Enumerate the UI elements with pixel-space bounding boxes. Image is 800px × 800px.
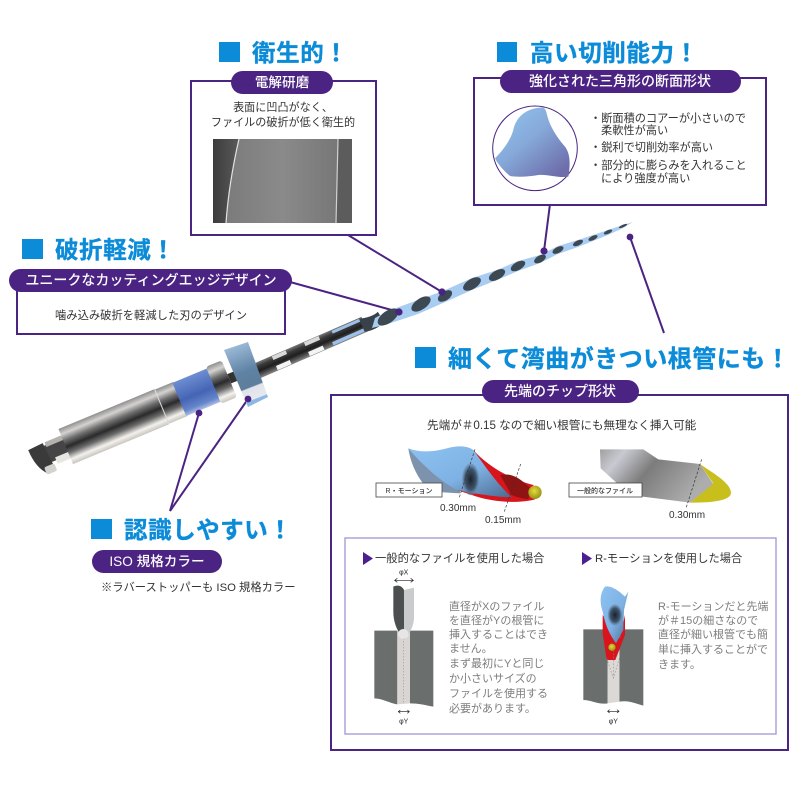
note: ※ラバーストッパーも ISO 規格カラー xyxy=(101,580,296,594)
text: general file: ファイルを使用する xyxy=(449,687,548,700)
pill label xyxy=(231,71,333,94)
pill label: ユニークなカッティングエッジデザイン xyxy=(25,272,277,288)
heading square xyxy=(219,42,240,62)
diagram: general file in root canal: φY xyxy=(399,718,409,725)
measurement: 0.15mm xyxy=(485,515,521,526)
text: general file: まず最初にYと同じ xyxy=(449,657,544,670)
frame xyxy=(191,81,376,235)
text: R-motion xyxy=(658,600,768,671)
heading: 衛生的！ xyxy=(252,40,348,66)
pill label xyxy=(482,380,639,403)
diagram: general file in root canal xyxy=(374,569,433,725)
description: 噛み込み破折を軽減した刃のデザイン xyxy=(55,308,247,322)
pill label: ISO 規格カラー xyxy=(109,554,205,569)
bullet list: により強度が高い xyxy=(601,171,690,185)
panel: 細くて湾曲がきつい根管にも xyxy=(331,345,790,750)
leader lines xyxy=(170,204,664,511)
measurement: 0.30mm xyxy=(440,503,476,514)
text: general file: 必要があります。 xyxy=(449,701,536,715)
diagram: general file in root canal: φX xyxy=(399,569,409,576)
label: R-motion xyxy=(376,483,442,497)
frame xyxy=(474,78,766,205)
handle xyxy=(25,349,265,479)
pill label xyxy=(92,550,222,573)
illustration: endodontic file instrument xyxy=(25,222,633,479)
text: R-motion: が＃15の細さなので xyxy=(658,613,758,627)
text: general file xyxy=(449,599,548,715)
heading: 細くて湾曲がきつい根管にも！ xyxy=(448,345,790,373)
tip illustration: general file xyxy=(569,449,731,521)
pill label: 強化された三角形の断面形状 xyxy=(529,73,711,89)
bullet list: ・断面積のコアーが小さいので xyxy=(590,111,746,125)
heading: 高い切削能力！ xyxy=(530,40,699,66)
panel: 認識しやすい xyxy=(91,517,296,594)
bullet list xyxy=(590,111,747,185)
heading: 破折軽減！ xyxy=(55,237,176,263)
text: general file: を直径がYの根管に xyxy=(449,613,544,627)
heading: 認識しやすい！ xyxy=(124,517,292,543)
label: general file: 一般的なファイル xyxy=(577,486,633,495)
diagram: R-motion in root canal: φY xyxy=(609,718,618,725)
frame xyxy=(331,395,788,750)
panel: 衛生的 xyxy=(191,40,376,235)
text: general file: ません。 xyxy=(449,642,493,655)
diagram: R-motion in root canal xyxy=(583,586,643,725)
frame xyxy=(17,285,285,334)
heading square xyxy=(91,519,112,539)
description: ファイルの破折が低く衛生的 xyxy=(211,115,355,129)
bullet list: ・鋭利で切削効率が高い xyxy=(590,140,713,154)
twisted flute body xyxy=(372,222,633,328)
bullet list: 柔軟性が高い xyxy=(601,123,668,137)
heading square xyxy=(497,42,517,62)
rubber stopper xyxy=(224,342,268,407)
text: R-motion: 直径が細い根管でも簡 xyxy=(658,627,768,641)
measurement: 0.30mm xyxy=(669,510,705,521)
text: general file: 挿入することはでき xyxy=(449,627,548,641)
pill label: 電解研磨 xyxy=(255,74,310,90)
panel: 破折軽減 xyxy=(9,237,292,334)
heading square xyxy=(22,239,43,259)
pill label xyxy=(9,269,292,292)
label: general file xyxy=(569,483,642,497)
pill label: 先端のチップ形状 xyxy=(504,383,616,399)
description xyxy=(211,100,355,129)
shank with depth marks xyxy=(247,309,385,382)
tip illustration: R-motion xyxy=(376,446,542,526)
leader dots xyxy=(196,234,633,416)
text: R-motion: R-モーションだと先端 xyxy=(658,600,768,613)
text: general file: か小さいサイズの xyxy=(449,671,537,685)
flute dark segments xyxy=(375,223,628,329)
panel: 高い切削能力 xyxy=(474,40,766,205)
description: 先端が＃0.15 なので細い根管にも無理なく挿入可能 xyxy=(427,418,697,432)
text: R-motion: 単に挿入することがで xyxy=(658,642,768,656)
bullet list: ・部分的に膨らみを入れること xyxy=(590,158,747,172)
cross-section icon xyxy=(493,106,577,191)
description: 表面に凹凸がなく、 xyxy=(233,100,333,114)
micrograph xyxy=(213,139,352,223)
subheading: general file: 一般的なファイルを使用した場合 xyxy=(375,551,544,565)
pill label xyxy=(500,70,741,93)
label: R-motion: R・モーション xyxy=(386,487,432,495)
subheading: R-motion: R-モーションを使用した場合 xyxy=(595,551,742,565)
text: general file: 直径がXのファイル xyxy=(449,599,544,613)
comparison box xyxy=(345,538,776,734)
heading square xyxy=(415,347,436,368)
text: R-motion: きます。 xyxy=(658,658,701,671)
